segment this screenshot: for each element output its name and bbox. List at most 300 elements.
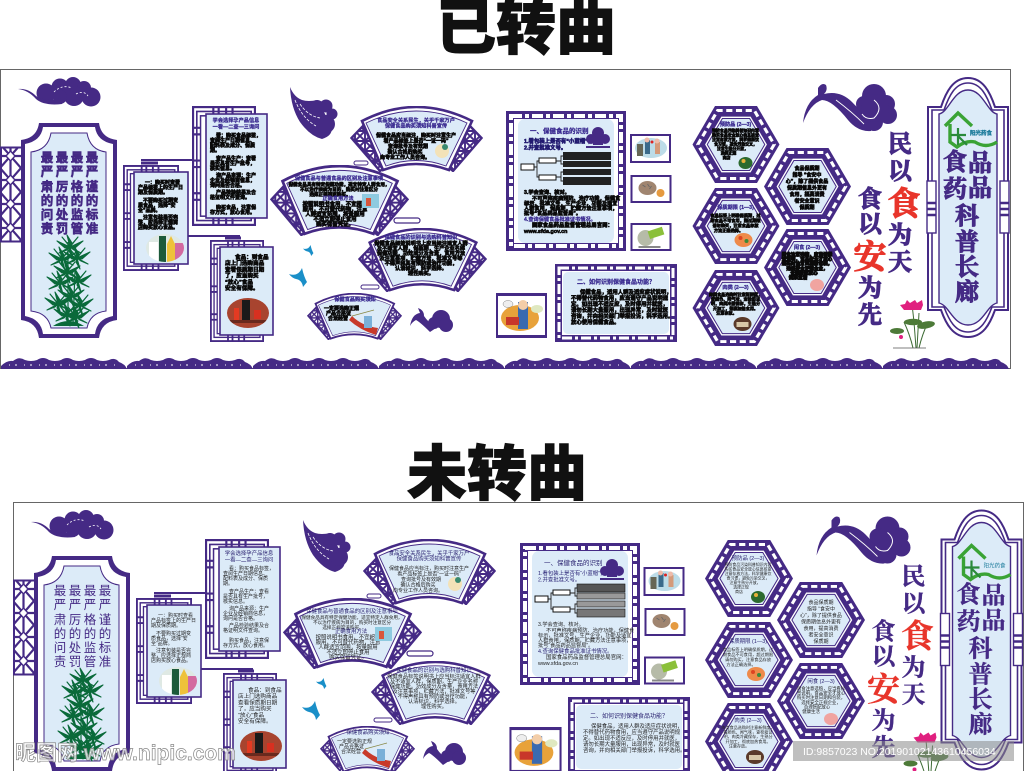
panel: fan text 2 <box>272 161 407 235</box>
panel: motto with bamboo: 最 <box>69 584 82 598</box>
heading: vertical motto 民以食为天: 天 <box>888 249 912 276</box>
panel: fan text 2: 不以治疗疾病为目的，购买时注意区分 <box>313 619 391 626</box>
panel: fan text 2: 不适立即停止食用 <box>326 648 370 656</box>
panel: selection guide: 购买食品，注意保 <box>229 637 269 644</box>
panel: hexagon 4: 闲食 (2—3) <box>807 677 835 685</box>
panel: how to identify: 保健食品，适用人群及适应症状说明， <box>591 722 683 730</box>
panel: motto with bamboo: 责 <box>54 655 66 669</box>
panel: motto with bamboo: 肃 <box>41 179 53 194</box>
icon: cloud top left <box>18 77 100 106</box>
panel: selection guide: 学会选择孕产品信息 <box>213 116 259 124</box>
panel: hexagon 1: 注意生熟分开放， <box>729 580 761 585</box>
panel: fan text 1 <box>364 540 494 604</box>
scalloped bottom strip <box>1 358 1009 369</box>
panel: hexagon 4: 闲食注意选购，应当看标 <box>782 251 833 258</box>
panel: motto with bamboo: 严 <box>41 165 53 179</box>
right group of decoration <box>816 510 1022 771</box>
icon: lotus <box>904 732 949 771</box>
panel: hexagon 1: 预防食品污染科普知识内容 <box>725 562 771 567</box>
panel: selection guide <box>193 107 267 225</box>
panel: motto with bamboo: 严 <box>99 598 111 612</box>
panel: hexagon 1: 注意生熟分开放， <box>717 146 748 151</box>
panel: fan text 3: 保健食品的识别与选购科普知识 <box>396 666 472 674</box>
panel: fan text 4 with boat: 产品合格证 <box>326 310 351 317</box>
panel: small framed notice with bottles: 质食品，选择“安 <box>151 635 188 642</box>
panel: fan text 1: 保健食品应当标注，购买时注意生产 <box>389 565 469 572</box>
panel: selection guide: 核实信息。 <box>210 165 235 172</box>
panel: hexagon 5: 看颜色、闻气味，查检疫证 <box>723 729 773 735</box>
panel: hexagon 3: 食品标签上明确保质期，过 <box>723 646 774 653</box>
panel: motto with bamboo: 肃 <box>54 613 66 627</box>
panel: selection guide <box>206 540 280 658</box>
panel: how to identify: 请勿长期大量服用，出现异常，及时就医 <box>583 740 681 748</box>
bottom panel: uncurved version wall design <box>14 502 1024 771</box>
panel: selection guide: 一看—二查—三询问 <box>213 122 259 130</box>
panel: how to identify: 保健食品，适用人群及适应症状说明， <box>580 288 672 296</box>
panel: hexagon 2: 者安全意识 <box>808 632 834 638</box>
panel: selection guide: 配料表及成分、保质 <box>223 575 268 582</box>
panel: motto with bamboo: 严 <box>84 598 96 612</box>
panel: hexagon 2: 保质期 <box>799 204 815 211</box>
panel: fan text 2: 保健食品与普通食品的区别及注意事项 <box>295 174 384 182</box>
panel: fan text 2: 选择正规渠道购买。 <box>322 624 364 631</box>
panel: health food identification: 一、保健食品的识别 <box>544 558 602 567</box>
heading: vertical motto 食以安为先: 以 <box>858 212 884 238</box>
panel: small framed notice with bottles: 产品标签上的生产日 <box>138 184 183 191</box>
panel: hexagon 5: 肉类 (2—3) <box>734 716 762 724</box>
panel: hexagon 4 <box>764 229 851 306</box>
panel: hexagon 1: 食习惯，避免污染交叉， <box>714 142 757 146</box>
panel: hexagon 1: 选择正规 <box>721 150 736 156</box>
panel: how to identify: 请勿长期大量服用，出现异常，及时就医 <box>571 306 669 314</box>
panel: how to identify <box>555 264 677 342</box>
watermark: image id band: ID:9857023 NO:20190102143610456034 <box>803 746 996 758</box>
panel: purchase notice with photo: 安全有保障。 <box>225 284 259 292</box>
panel: selection guide: 看：购买食品标签， <box>229 565 274 572</box>
panel: selection guide: 格证明文件查询。 <box>210 194 250 201</box>
panel: hexagon 3: 请勿购买，注意食品存放 <box>712 222 759 229</box>
panel: hexagon 1: 商店 <box>723 155 730 160</box>
panel: motto with bamboo <box>14 556 130 771</box>
panel: health food identification: 3.学会查询、核对。 <box>538 620 584 628</box>
heading: vertical motto 民以食为天: 天 <box>902 682 926 708</box>
panel: health food identification: 一、保健食品的识别 <box>530 126 589 135</box>
panel: corridor title with logo: 廊 <box>968 710 992 738</box>
panel: motto with bamboo: 最 <box>41 151 54 165</box>
panel: health food identification: 不可声称疾病预防、治疗功能，保健食 <box>546 626 635 634</box>
panel: fan text 4 with boat <box>308 285 401 339</box>
panel: hexagon 2: 食品保质期 <box>808 599 834 606</box>
panel: how to identify: 二、如何识别保健食品功能？ <box>577 278 655 286</box>
panel: fan text 3: 保健功能，功效成分及含量，食用方法 <box>390 682 478 690</box>
panel: health food identification: 人群食用，保质期，贮藏方法注意事项， <box>538 636 631 644</box>
panel: motto with bamboo: 处 <box>69 641 82 655</box>
bottom panel frame <box>14 502 1024 771</box>
panel: small framed notice with bottles: 全”品牌。 <box>138 207 161 214</box>
panel: purchase notice with photo: 店上门选购商品 <box>238 692 278 700</box>
panel: small framed notice with bottles: 注意包装是否完 <box>156 647 191 654</box>
panel: small framed notice with bottles: 期及保质期。 <box>151 622 181 629</box>
panel: motto with bamboo: 厉 <box>69 613 81 627</box>
panel: small framed notice with bottles: 不要购买过期变 <box>156 630 191 637</box>
panel: corridor title with logo: 普 <box>955 229 979 256</box>
panel: hexagon 3: 保质期限 (1—3) <box>729 637 767 645</box>
panel: fan text 1: 食品安全关系民生，关乎千家万户 <box>389 549 469 557</box>
panel: hexagon 2: 食用，提高消费 <box>789 191 825 198</box>
panel: fan text 2: 购买保留凭证。 <box>316 220 354 228</box>
panel: hexagon 4: 闲食 (2—3) <box>794 243 820 251</box>
panel: corridor title with logo: 品 <box>968 150 992 177</box>
panel: health food identification: 4.查询保健食品批准证书情况。 <box>524 215 596 223</box>
panel: purchase notice with photo: “放心”食品 <box>238 711 265 719</box>
panel: hexagon 2: 保质期信息外更有 <box>801 618 841 626</box>
panel: motto with bamboo: 最 <box>54 584 67 598</box>
heading: vertical motto 民以食为天: 以 <box>902 592 928 618</box>
panel: motto with bamboo: 最 <box>99 584 112 598</box>
panel: health food identification: 3.学会查询、核对。 <box>524 188 570 196</box>
panel: fan text 1: 保健食品应当标注，购买时注意生产 <box>376 132 456 139</box>
panel: health food identification: 标示，批准文号，生产企业，功能及适宜 <box>538 631 631 639</box>
panel: hexagon 4: 选择安全正规企业， <box>801 699 841 706</box>
panel: fan text 4 with boat: 合法经营 <box>341 748 361 755</box>
panel: hexagon 1 <box>705 540 793 617</box>
panel: health food identification: 国家食品药品监督管理总局官网： <box>546 653 627 661</box>
heading: vertical motto 民以食为天: 以 <box>888 159 914 185</box>
panel: motto with bamboo: 问 <box>41 208 53 222</box>
heading: vertical motto 食以安为先: 安 <box>854 239 888 276</box>
image: cartoon 3 <box>644 656 685 684</box>
panel: hexagon 2: 心”，除了提供食品 <box>800 612 842 619</box>
panel: fan text 3: 认清标识，科学选择。 <box>395 264 447 272</box>
panel: purchase notice with photo: 安全有保障。 <box>238 717 272 725</box>
image: cartoon 1 <box>644 567 684 596</box>
panel: hexagon 1: 注意存放方法，科学健康饮 <box>712 137 759 142</box>
panel: health food identification: www.sfda.gov.cn <box>537 661 578 667</box>
heading: vertical motto 食以安为先: 食 <box>872 618 896 646</box>
panel: hexagon 4: 购买时注意日期和包装， <box>782 260 832 267</box>
panel: motto with bamboo <box>1 123 117 338</box>
panel: health food identification: 人群食用，保质期，贮藏方法注意事项， <box>524 204 617 212</box>
panel: corridor title with logo: 科 <box>955 203 979 230</box>
heading: vertical motto 食以安为先: 先 <box>872 734 896 762</box>
top panel: curved version wall design <box>0 70 1010 369</box>
panel: motto with bamboo: 谨 <box>99 613 111 627</box>
panel: hexagon 2: 指导 “食安中 <box>807 606 835 612</box>
panel: corridor title with logo: 长 <box>968 686 992 714</box>
icon: blue birds <box>302 678 326 720</box>
panel: how to identify: 定。如出现不适反应，及时停用并就医， <box>571 300 668 308</box>
heading: vertical motto 民以食为天: 食 <box>888 186 920 223</box>
panel: hexagon 3 <box>705 622 793 698</box>
panel: motto with bamboo: 的 <box>54 626 66 641</box>
panel: fan text 2: 正确食用方法 <box>322 194 354 202</box>
panel: selection guide: 产品检验结果及合 <box>229 622 269 629</box>
panel: purchase notice with photo: 店上门选购商品 <box>225 259 265 267</box>
panel: selection guide: 查阅生产日期信息、 <box>210 137 255 144</box>
panel: corridor title with logo: 药 <box>956 608 980 636</box>
panel: hexagon 1: 预防品 (2—3) <box>720 120 751 128</box>
panel: selection guide: 配料表及成分、保质 <box>210 142 255 149</box>
panel: fan text 3: 理性购买。 <box>408 269 434 277</box>
panel: hexagon 4: 合理搭配放心 <box>790 269 818 276</box>
icon: cloud top left <box>31 510 114 540</box>
panel: fan text 1: 确认合格后购买 <box>387 148 423 156</box>
panel: how to identify: 放心使用保健食品。 <box>571 318 620 326</box>
panel: fan text 2: 正确食用方法 <box>335 627 368 635</box>
panel: selection guide: 查阅生产日期信息、 <box>223 570 268 577</box>
panel: purchase notice with photo: 食品：到食品 <box>235 253 269 261</box>
panel: hexagon 4: 购买时注意日期和包装， <box>797 694 845 701</box>
panel: health food identification: 4.查询保健食品批准证书情况。 <box>538 647 613 655</box>
panel: fan text 1: 向专业工作人员咨询。 <box>393 587 443 594</box>
panel: fan text 4 with boat <box>321 718 414 771</box>
panel: hexagon 5 <box>692 270 780 346</box>
panel: motto with bamboo: 的 <box>71 193 83 208</box>
panel: hexagon 5: 注意存放。 <box>716 309 737 315</box>
panel: fan text 3 <box>359 218 486 291</box>
panel: hexagon 4: 健康生活 <box>789 274 808 281</box>
panel: fan text 1: 看产品标签上是否“一证一码” <box>397 570 461 578</box>
panel: fan text 3: 不得声称具有预防或治疗功能， <box>398 692 470 700</box>
icon: blue birds <box>289 245 313 287</box>
panel: hexagon 5: 肉类食品选购时注意新鲜度， <box>721 724 775 730</box>
panel: hexagon 2 <box>777 582 865 658</box>
panel: motto with bamboo: 的 <box>56 193 68 208</box>
panel: motto with bamboo: 管 <box>71 221 83 236</box>
panel: hexagon 1: 注意存放方法，科学健康饮 <box>725 571 771 576</box>
panel: fan text 1: 查询批号及有效期 <box>401 576 441 583</box>
panel: selection guide: 查产品生产：查看 <box>229 588 269 595</box>
panel: motto with bamboo: 的 <box>86 193 98 208</box>
panel: fan text 2: 不以治疗疾病为目的，购买时注意区分 <box>300 186 378 193</box>
panel: fan text 1: 查询批号及有效期 <box>388 143 428 150</box>
panel: corridor title with logo: 品 <box>968 175 992 202</box>
panel: hexagon 2: 心”，除了提供食品 <box>786 178 828 185</box>
panel: motto with bamboo: 最 <box>86 151 99 165</box>
panel: hexagon 3: 食品标签上明确保质期，过 <box>710 212 761 219</box>
icon: lotus <box>890 300 935 348</box>
panel: hexagon 1: 预防食品污染科普知识内容 <box>712 128 759 133</box>
panel: fan text 3: 及注意事项，贮藏方法，批准文号等 <box>392 687 476 695</box>
panel: hexagon 2 <box>764 148 851 225</box>
panel: selection guide: 企业及经销商信息， <box>223 610 268 617</box>
panel: fan text 2: 选择正规渠道购买。 <box>309 191 351 198</box>
panel: motto with bamboo: 监 <box>84 641 96 655</box>
panel: hexagon 4: 闲食注意选购，应当看标 <box>797 685 846 692</box>
panel: health food identification: 标示，批准文号，生产企业，功能及适宜 <box>524 199 617 207</box>
panel: hexagon 1: 购买食品安全放心信息核查 <box>725 566 771 572</box>
panel: fan text 2: 人群适宜范围，按量服用 <box>318 643 378 651</box>
panel: health food identification <box>506 111 626 251</box>
panel: fan text 2: 不适立即停止食用 <box>313 215 357 223</box>
image: cartoon 4 <box>496 293 547 338</box>
panel: selection guide: 是否具有生产批号， <box>223 593 268 600</box>
panel: hexagon 5: 开加工，彻底加热食用。 <box>713 305 758 311</box>
panel: motto with bamboo: 的 <box>41 193 53 208</box>
heading: vertical motto 民以食为天 <box>888 131 920 276</box>
panel: fan text 2: 按照说明书食用，不宜超量 <box>303 200 368 208</box>
panel: hexagon 4: 签说明，食品安全才放心 <box>797 690 846 697</box>
panel: fan text 4 with boat: 一定要选购正规 <box>337 738 372 745</box>
panel: how to identify: 咨询，并向相关部门举报投诉，科学选用。 <box>571 312 673 320</box>
panel: health food identification: 2.并查批准文号。 <box>524 144 566 152</box>
panel: fan text 3: 保健食品标签说明书上应当标注适宜人群 <box>374 239 468 247</box>
panel: corridor title with logo: 食 <box>943 149 967 176</box>
panel: purchase notice with photo: 食品：到食品 <box>248 686 282 694</box>
panel: fan text 2: 服用，不可替代药物，注意 <box>303 205 368 213</box>
panel: how to identify: 不得替代药物食用，应当遵守产品说明规 <box>571 294 669 302</box>
panel: fan text 4 with boat: 合法经营 <box>328 315 348 322</box>
panel: motto with bamboo: 的 <box>69 626 81 641</box>
panel: hexagon 2: 食用，提高消费 <box>803 625 839 632</box>
heading: vertical motto 民以食为天: 民 <box>888 131 912 158</box>
panel: fan text 3: 保健功能，功效成分及含量，食用方法 <box>377 249 465 257</box>
icon: cloud emblem <box>586 127 610 148</box>
panel: fan text 2: 购买保留凭证。 <box>329 653 367 661</box>
top panel frame <box>0 70 1010 368</box>
panel: corridor title with logo: 科 <box>968 636 992 662</box>
panel: corridor title with logo: 食 <box>956 582 980 608</box>
panel: hexagon 2: 保质期 <box>813 638 829 645</box>
panel: selection guide: 看：购买食品标签， <box>216 132 261 139</box>
panel: fan text 4 with boat: 一定要选购正规 <box>324 305 359 312</box>
panel: purchase notice with photo: “放心”食品 <box>225 278 253 286</box>
panel: hexagon 1 <box>692 106 780 183</box>
panel: fan text 2: 人群适宜范围，按量服用 <box>305 210 365 218</box>
panel: small framed notice with bottles <box>137 593 253 703</box>
panel: motto with bamboo: 准 <box>86 221 99 236</box>
panel: selection guide: 询产品来源：生产 <box>216 172 256 179</box>
image: cartoon 2 <box>644 608 686 636</box>
panel: motto with bamboo: 严 <box>71 165 83 179</box>
panel: selection guide: 期。 <box>223 581 233 587</box>
heading: vertical motto 民以食为天 <box>901 564 934 708</box>
panel: selection guide: 一看—二查—三询问 <box>225 556 273 564</box>
panel: hexagon 4: 选择安全正规企业， <box>786 265 828 272</box>
panel: health food identification: 1.看包装上是否有“小蓝帽”， <box>538 569 605 577</box>
panel: small framed notice with bottles: 不要购买过期变 <box>143 197 178 204</box>
panel: fan text 2: 服用，不可替代药物，注意 <box>316 638 381 646</box>
panel: fan text 2: 保健食品具有特定保健功能，适宜特定人群食用， <box>288 181 390 188</box>
panel: motto with bamboo: 最 <box>84 584 97 598</box>
panel: fan text 1: 保健食品购买须知科普宣传 <box>397 554 462 562</box>
panel: fan text 4 with boat: 保健食品购买须知 <box>346 728 390 736</box>
icon: big swirl cloud <box>816 516 910 564</box>
heading: vertical motto 食以安为先: 食 <box>858 186 882 213</box>
panel: small framed notice with bottles: 全”品牌。 <box>151 640 173 647</box>
panel: hexagon 3: 保质期限 (1—3) <box>717 203 754 211</box>
panel: hexagon 3: 方法正确选择。 <box>714 227 743 234</box>
panel: motto with bamboo: 罚 <box>56 222 68 236</box>
heading: vertical motto 民以食为天: 为 <box>888 222 912 249</box>
panel: how to identify: 二、如何识别保健食品功能？ <box>590 712 668 720</box>
panel: motto with bamboo: 严 <box>56 165 68 179</box>
panel: purchase notice with photo: 查看保质期日期 <box>238 698 278 706</box>
panel: hexagon 3: 请勿购买，注意食品存放 <box>725 656 772 663</box>
panel: hexagon 2: 指导 “食安中 <box>793 172 821 178</box>
panel: hexagon 5: 看颜色、闻气味，查检疫证 <box>711 296 760 302</box>
panel: purchase notice with photo <box>224 671 286 771</box>
panel: fan text 3: 理性购买。 <box>421 702 447 710</box>
panel: corridor title with logo: 品 <box>982 582 1006 610</box>
panel: fan text 1: 确认合格后购买 <box>400 582 436 588</box>
panel: motto with bamboo: 格 <box>84 612 97 627</box>
panel: small framed notice with bottles <box>124 160 240 270</box>
panel: motto with bamboo: 监 <box>71 207 83 222</box>
middle group of panels <box>509 543 690 771</box>
heading: vertical motto 食以安为先: 安 <box>867 672 902 708</box>
panel: small framed notice with bottles: 一：购买时查看 <box>145 179 180 186</box>
panel: motto with bamboo: 标 <box>99 641 111 655</box>
panel: hexagon 4: 健康生活 <box>802 708 820 715</box>
panel: fan text 2 <box>285 594 420 668</box>
panel: motto with bamboo: 处 <box>56 207 69 222</box>
image: cartoon 3 <box>630 223 672 251</box>
panel: selection guide: 产品检验结果及合 <box>216 189 256 196</box>
panel: small framed notice with bottles: 注意包装是否完 <box>143 214 178 221</box>
panel: corridor title with logo: 长 <box>955 254 979 281</box>
panel: fan text 3: 及注意事项，贮藏方法，批准文号等 <box>379 254 463 262</box>
panel: fan text 1: 保健食品购买须知科普宣传 <box>385 122 447 130</box>
panel: small framed notice with bottles: 店购买放心食品。 <box>138 224 178 231</box>
panel: motto with bamboo: 的 <box>99 626 111 641</box>
panel: fan text 1: 看产品标签上是否“一证一码” <box>383 138 449 144</box>
icon: big swirl cloud <box>803 84 897 131</box>
panel: fan text 3: 认清标识，科学选择。 <box>408 697 460 705</box>
panel: motto with bamboo: 的 <box>84 626 96 641</box>
heading: vertical motto 食以安为先 <box>854 186 888 329</box>
panel: selection guide: 期。 <box>210 147 220 154</box>
panel: small framed notice with bottles: 期及保质期。 <box>138 189 168 196</box>
panel: motto with bamboo: 管 <box>84 654 96 669</box>
panel: hexagon 3: 期食品不可食用，超过期限 <box>723 651 774 658</box>
panel: motto with bamboo: 严 <box>86 165 98 179</box>
panel: hexagon 2: 食品保质期 <box>794 165 820 172</box>
panel: fan text 3: 保健食品的识别与选购科普知识 <box>385 233 457 241</box>
panel: hexagon 1: 选择正规 <box>733 584 749 590</box>
heading: vertical motto 民以食为天: 食 <box>901 618 934 656</box>
image: cartoon 1 <box>630 134 671 163</box>
panel: selection guide: 企业及经销商信息， <box>210 177 255 184</box>
heading: 未转曲: 未转曲 <box>407 441 587 508</box>
panel: corridor title with logo: 品 <box>982 608 1006 634</box>
panel: hexagon 1: 预防品 (2—3) <box>732 554 765 562</box>
panel: hexagon 3: 方法正确选择。 <box>726 661 756 668</box>
panel: hexagon 4 <box>777 663 865 739</box>
panel: corridor title with logo: 阳光药食 <box>970 129 993 137</box>
panel: purchase notice with photo: 了，应当购买 <box>238 705 272 713</box>
panel: hexagon 4: 合理搭配放心 <box>804 703 831 710</box>
panel: selection guide: 询问是否合格。 <box>223 615 258 622</box>
heading: vertical motto 民以食为天: 为 <box>902 654 926 682</box>
panel: corridor title with logo: 廊 <box>955 278 979 306</box>
panel: purchase notice with photo: 了，应当购买 <box>225 272 259 280</box>
left group of panels <box>14 510 499 771</box>
panel: small framed notice with bottles: 整，应选择正规商 <box>151 652 191 659</box>
panel: motto with bamboo: 格 <box>71 179 84 194</box>
panel: selection guide: 学会选择孕产品信息 <box>225 549 274 557</box>
panel: motto with bamboo: 问 <box>54 641 66 655</box>
panel: selection guide: 询问是否合格。 <box>210 182 245 189</box>
panel: fan text 3: 及不适宜人群，保质期，生产企业名称 <box>377 244 466 252</box>
panel: hexagon 5 <box>705 703 793 771</box>
panel: motto with bamboo: 严 <box>69 598 81 612</box>
icon: small cloud <box>410 308 453 332</box>
panel: hexagon 1: 商店 <box>735 589 743 594</box>
panel: health food identification: 批号“食品药品监督局”。 <box>538 641 593 649</box>
panel: fan text 2: 按照说明书食用，不宜超量 <box>316 633 381 641</box>
icon: cloud emblem <box>600 559 624 580</box>
